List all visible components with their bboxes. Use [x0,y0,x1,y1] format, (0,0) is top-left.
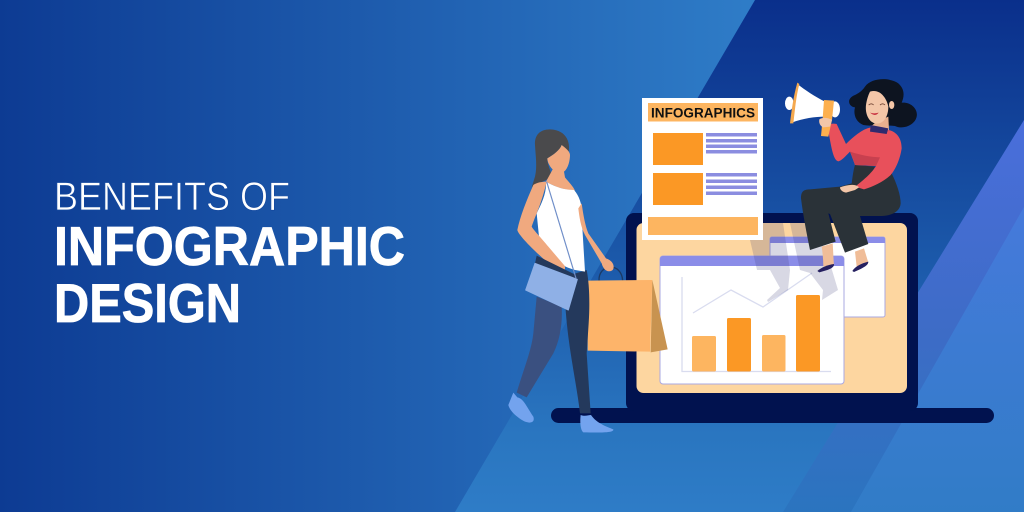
face and neck [546,145,575,191]
woman walking with shopping bag [508,129,668,432]
hair [849,79,917,127]
shoes [817,262,868,272]
lower body [801,165,901,253]
arms [517,182,614,274]
infographic document [642,98,763,240]
title [54,175,405,334]
hair [532,129,569,187]
leg shadows [750,223,838,302]
torso [537,182,585,272]
purse [526,182,577,310]
raised hand [819,118,832,127]
rear leg [517,297,562,397]
main chart window [660,256,844,384]
collar [870,125,888,134]
front shoe [580,415,613,432]
title: DESIGN [54,272,241,334]
neck [871,117,889,130]
hand on lap [840,185,859,193]
title: INFOGRAPHIC [54,215,405,277]
infographic document: INFOGRAPHICS [651,106,755,120]
shopping bag [588,267,668,352]
bar chart [692,295,820,372]
woman sitting with megaphone [785,79,917,272]
back window [770,237,885,317]
face [866,91,894,124]
lower legs [822,243,868,267]
megaphone [785,83,840,137]
rear shoe [508,393,534,423]
sweater [827,124,902,189]
laptop [551,213,994,423]
front leg [565,270,591,413]
sweater shading [850,152,880,166]
title: BENEFITS OF [54,175,290,219]
chart axes and line [682,273,831,372]
